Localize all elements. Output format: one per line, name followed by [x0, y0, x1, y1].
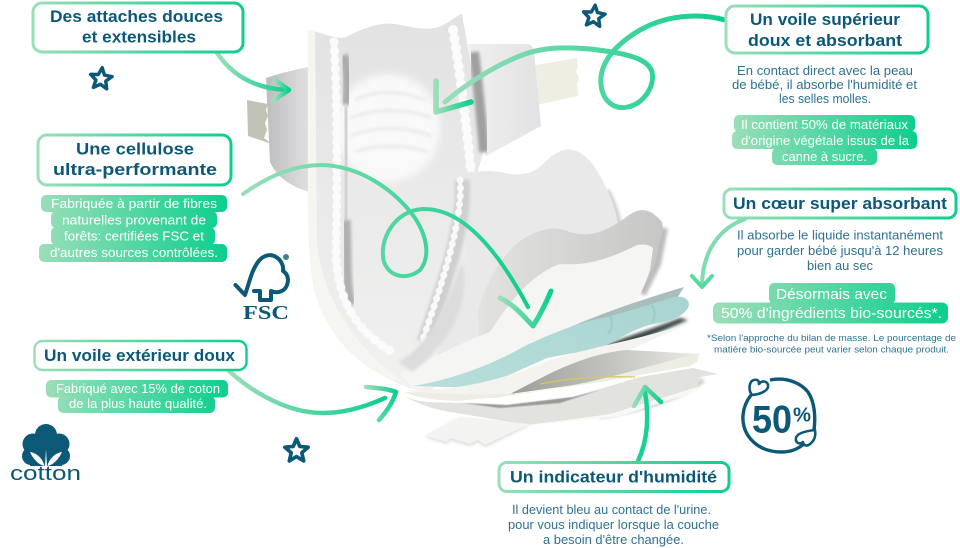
- description: a besoin d'être changée.: [543, 533, 684, 547]
- description: de la plus haute qualité.: [69, 397, 207, 411]
- highlight background: [39, 195, 227, 262]
- highlight background: [46, 380, 228, 413]
- blue absorbent core: [413, 287, 689, 388]
- white separator sheet: [405, 322, 692, 398]
- arrow: attaches: [217, 53, 289, 100]
- heading box: [726, 6, 928, 53]
- callout: voile supérieur: [726, 6, 928, 165]
- icon: star left: [89, 67, 113, 89]
- callout: cœur: [707, 189, 956, 356]
- highlight text: canne à sucre.: [782, 150, 867, 164]
- diaper illustration: [247, 14, 718, 447]
- heading text: Un voile extérieur doux: [44, 346, 236, 365]
- diaper shell: [308, 14, 510, 392]
- wetness indicator layer: [405, 350, 700, 401]
- description: En contact direct avec la peau: [737, 64, 913, 78]
- arrow: indicateur: [634, 387, 661, 461]
- heading text: Un cœur super absorbant: [733, 194, 947, 213]
- highlight text: Il contient 50% de matériaux: [741, 118, 909, 132]
- description: pour garder bébé jusqu'à 12 heures: [737, 244, 943, 258]
- description: de bébé, il absorbe l'humidité et: [732, 78, 918, 92]
- heading text: Un voile supérieur: [750, 10, 900, 29]
- description: forêts: certifiées FSC et: [64, 230, 205, 244]
- description: Il devient bleu au contact de l'urine.: [512, 503, 711, 517]
- description: pour vous indiquer lorsque la couche: [508, 518, 719, 532]
- highlight background: [732, 115, 917, 165]
- icon: 50% badge: %: [793, 404, 811, 426]
- icon: star top: [582, 4, 606, 27]
- white absorbent layer: [398, 245, 653, 388]
- heading box: [34, 341, 246, 370]
- description: bien au sec: [807, 259, 873, 273]
- icon: FSC logo: FSC: [243, 302, 289, 324]
- footnote: *Selon l'approche du bilan de masse. Le pourcentage de: [707, 333, 956, 344]
- footnote: matière bio-sourcée peut varier selon chaque produit.: [714, 344, 949, 356]
- callout: cellulose: [38, 135, 231, 262]
- description: Il absorbe le liquide instantanément: [737, 228, 944, 242]
- callout: voile extérieur: [34, 341, 246, 413]
- description: Fabriqué avec 15% de coton: [56, 382, 220, 396]
- heading text: Des attaches douces: [50, 7, 223, 26]
- grey absorbent layer: [478, 210, 664, 360]
- heading text: Une cellulose: [76, 140, 194, 158]
- icon: star bottom: [285, 439, 308, 461]
- callout: indicateur: [499, 462, 729, 547]
- lower tape: [425, 417, 530, 447]
- icon: FSC logo: [236, 254, 289, 324]
- description: naturelles provenant de: [62, 214, 206, 228]
- heading box: [724, 189, 956, 218]
- icon: cotton logo: [10, 424, 81, 485]
- highlight text: 50% d'ingrédients bio-sourcés*.: [721, 305, 942, 322]
- heading text: Un indicateur d'humidité: [510, 468, 717, 486]
- heading box: [499, 462, 729, 492]
- heading text: et extensibles: [82, 28, 196, 46]
- description: d'autres sources contrôlées.: [50, 246, 218, 260]
- description: les selles molles.: [779, 92, 871, 106]
- callout: attaches: [33, 3, 243, 52]
- outer bottom sheet: [404, 368, 718, 426]
- top pad layer: [422, 150, 620, 385]
- arrow: cœur: [692, 219, 745, 287]
- heading box: [38, 135, 231, 185]
- icon: 50% badge: [743, 379, 815, 452]
- heading box: [33, 3, 243, 52]
- arrow: cellulose: [243, 165, 551, 326]
- icon: 50% badge: 50: [752, 398, 792, 442]
- description: Fabriquée à partir de fibres: [51, 197, 217, 211]
- right fastening tab: [468, 44, 579, 156]
- arrow: voile extérieur: [228, 370, 396, 420]
- icon: cotton logo: cotton: [10, 463, 81, 485]
- highlight text: d'origine végétale issus de la: [741, 134, 909, 148]
- heading text: ultra-performante: [53, 160, 217, 179]
- heading text: doux et absorbant: [748, 31, 902, 50]
- left fastening tab: [247, 66, 313, 193]
- arrow: voile supérieur: [436, 16, 725, 112]
- highlight background: [713, 283, 948, 324]
- highlight text: Désormais avec: [776, 286, 888, 303]
